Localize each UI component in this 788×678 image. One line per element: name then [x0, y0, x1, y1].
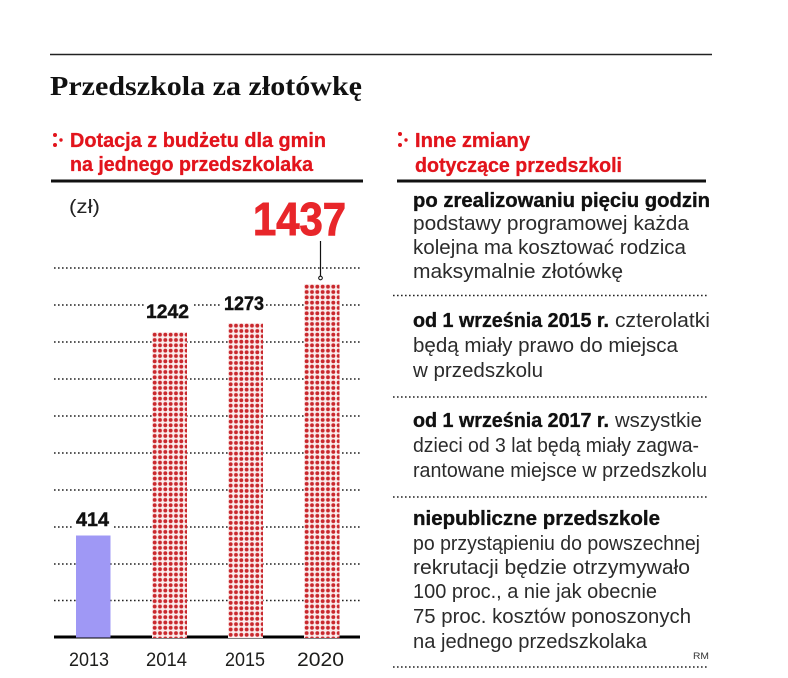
text block: non-public preschools: rekrutacji będzie otrzymywało — [413, 556, 690, 579]
bar: 2015: 1273 — [224, 294, 264, 315]
callout: 1437 — [253, 193, 346, 280]
icon: three red dots — [53, 133, 63, 147]
bar: 2013 — [74, 510, 112, 638]
credit: RM — [693, 651, 709, 662]
text block: 2017: dzieci od 3 lat będą miały zagwa- — [413, 434, 699, 457]
year labels: 2014 — [146, 650, 187, 671]
year labels: 2020 — [297, 650, 344, 671]
bar: 2015 — [222, 294, 266, 638]
right heading — [398, 130, 622, 177]
text block: 2017: rantowane miejsce w przedszkolu — [413, 459, 707, 482]
bar: 2014 — [144, 300, 192, 638]
text block: five hours — [413, 189, 710, 283]
text block: 2015: od 1 września 2015 r. — [413, 309, 609, 332]
text block: non-public preschools: po przystąpieniu do powszechnej — [413, 532, 700, 555]
bar: 2014: 1242 — [146, 302, 189, 323]
text block: 2017 — [413, 409, 707, 482]
unit label: (zł) — [69, 197, 100, 218]
chart heading: na jednego przedszkolaka — [70, 154, 314, 176]
text block: non-public preschools: 100 proc., a nie jak obecnie — [413, 580, 657, 603]
text block: 2015 — [412, 309, 710, 382]
callout: 1437: 1437 — [253, 193, 346, 245]
bar: 2020 — [304, 284, 340, 638]
chart heading — [53, 130, 326, 176]
right heading: Inne zmiany — [415, 130, 531, 152]
title: Przedszkola za złotówkę — [50, 71, 362, 101]
year labels: 2013 — [69, 650, 109, 671]
text block: 2015: będą miały prawo do miejsca — [413, 334, 679, 357]
text block: 2017: od 1 września 2017 r. — [413, 409, 609, 432]
text block: 2015: czterolatki — [615, 309, 710, 332]
text block: non-public preschools: na jednego przedszkolaka — [413, 630, 648, 653]
right heading: dotyczące przedszkoli — [415, 155, 622, 177]
text block: five hours: po zrealizowaniu pięciu godzin — [413, 189, 710, 212]
text block: non-public preschools — [413, 507, 700, 653]
text block: non-public preschools: 75 proc. kosztów ponoszonych — [413, 605, 691, 628]
bar: 2013: 414 — [76, 510, 109, 531]
chart heading: Dotacja z budżetu dla gmin — [70, 130, 326, 152]
text block: five hours: kolejna ma kosztować rodzica — [413, 236, 687, 259]
icon: three red dots — [398, 132, 408, 147]
text block: 2015: w przedszkolu — [412, 359, 543, 382]
panel: other changes — [393, 130, 710, 667]
text block: non-public preschools: niepubliczne przedszkole — [413, 507, 660, 530]
year labels: 2015 — [225, 650, 265, 671]
text block: five hours: maksymalnie złotówkę — [413, 260, 623, 283]
year labels — [69, 650, 344, 671]
text block: 2017: wszystkie — [614, 409, 702, 432]
panel: bar chart section — [51, 130, 363, 671]
text block: five hours: podstawy programowej każda — [413, 212, 690, 235]
